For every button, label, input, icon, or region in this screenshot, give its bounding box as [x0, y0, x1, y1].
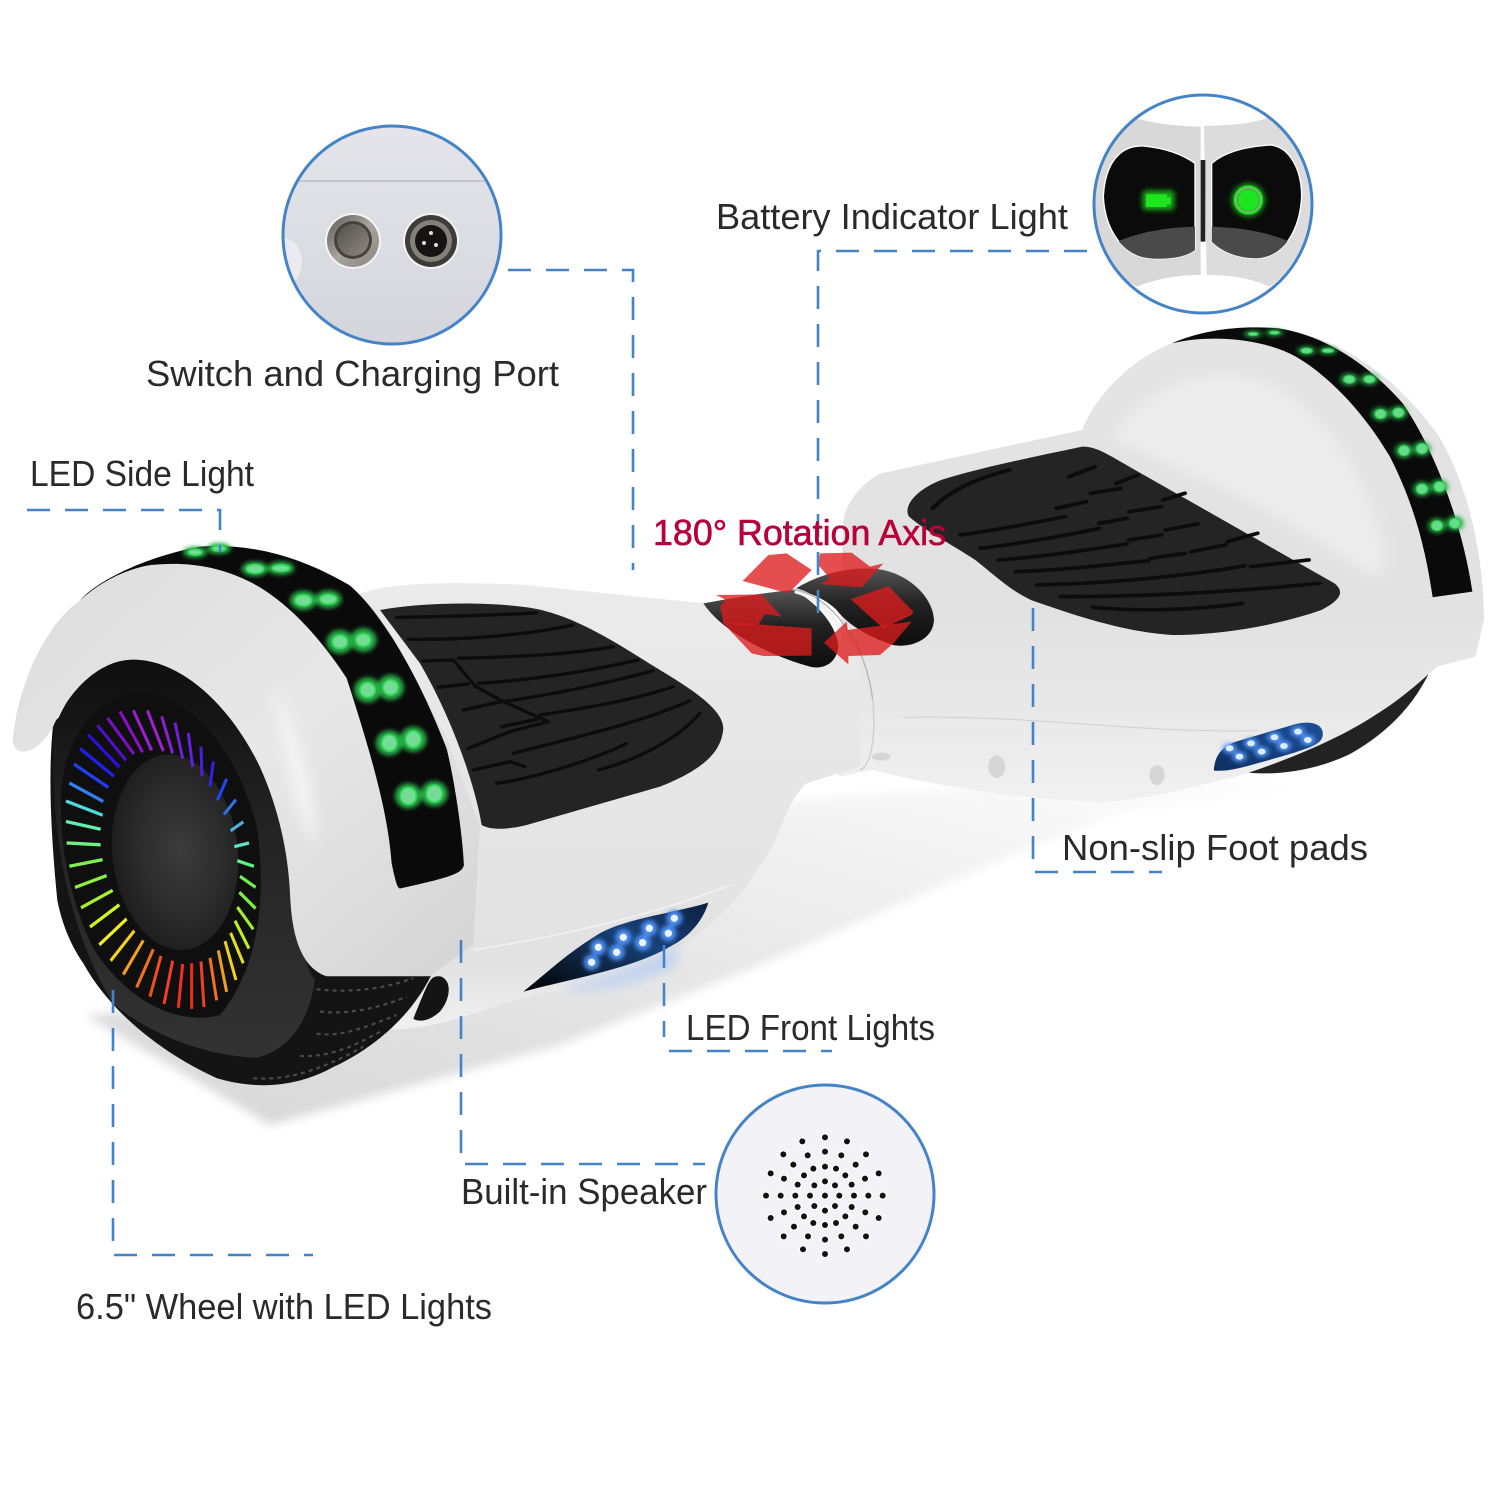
- front LED strip: [80, 546, 464, 889]
- rainbow LED bars: [66, 710, 256, 1009]
- central rotation hub: [703, 569, 934, 770]
- label: wheel: 6.5" Wheel with LED Lights: [76, 1286, 492, 1327]
- rear blue LED panel: [872, 717, 1323, 785]
- front LED glow: [183, 543, 448, 809]
- front wheel: [13, 543, 480, 1085]
- rear fender inner shading: [1112, 375, 1386, 580]
- label: built-in speaker: Built-in Speaker: [461, 1171, 707, 1212]
- speaker holes: [763, 1134, 886, 1257]
- dashed leader lines: [27, 251, 1162, 1255]
- rear foot pad: [907, 447, 1340, 635]
- body lower seam: [473, 885, 730, 950]
- hoverboard: [13, 327, 1484, 1085]
- label: non-slip foot pads: Non-slip Foot pads: [1062, 827, 1368, 868]
- right indicator panel: [1212, 145, 1302, 258]
- rear tire: [1249, 670, 1430, 773]
- inset: speaker: [716, 1085, 934, 1303]
- label: battery indicator light: Battery Indicator Light: [716, 196, 1068, 237]
- rear body and fender: [839, 329, 1484, 802]
- front LED cores: [188, 546, 442, 804]
- inset: battery indicator light: [1093, 95, 1312, 313]
- rear LED glow dots: [1245, 329, 1463, 533]
- rim: [54, 656, 315, 1058]
- battery icon: [1143, 191, 1174, 210]
- fender highlight: [273, 686, 315, 849]
- front fender: [13, 556, 480, 976]
- blue reflection: [560, 945, 680, 990]
- charging socket: [403, 213, 459, 269]
- front blue LED panel: [523, 903, 708, 992]
- power ring: [1232, 183, 1265, 217]
- LED ring base: [61, 693, 261, 1018]
- label: rotation axis: 180° Rotation Axis: [653, 512, 946, 553]
- front body: [327, 583, 860, 1030]
- body seam and screw dimples: [872, 717, 1257, 785]
- label: switch and charging port: Switch and Charging Port: [146, 353, 559, 394]
- ground shadow: [85, 770, 1300, 1125]
- red rotation arrows: [716, 553, 913, 664]
- rear LED strip: [1172, 327, 1472, 597]
- gear cover pocket: [413, 976, 449, 1021]
- front foot pad: [380, 604, 723, 829]
- tire tread: [253, 978, 413, 1079]
- hub: [101, 745, 249, 959]
- rear LED cores: [1248, 331, 1460, 531]
- tire: [50, 678, 433, 1085]
- label: LED front lights: LED Front Lights: [686, 1007, 935, 1048]
- power button: [325, 213, 381, 269]
- label: LED side light: LED Side Light: [30, 453, 254, 494]
- inset: switch and charging port: [266, 126, 510, 344]
- left indicator panel: [1103, 146, 1195, 259]
